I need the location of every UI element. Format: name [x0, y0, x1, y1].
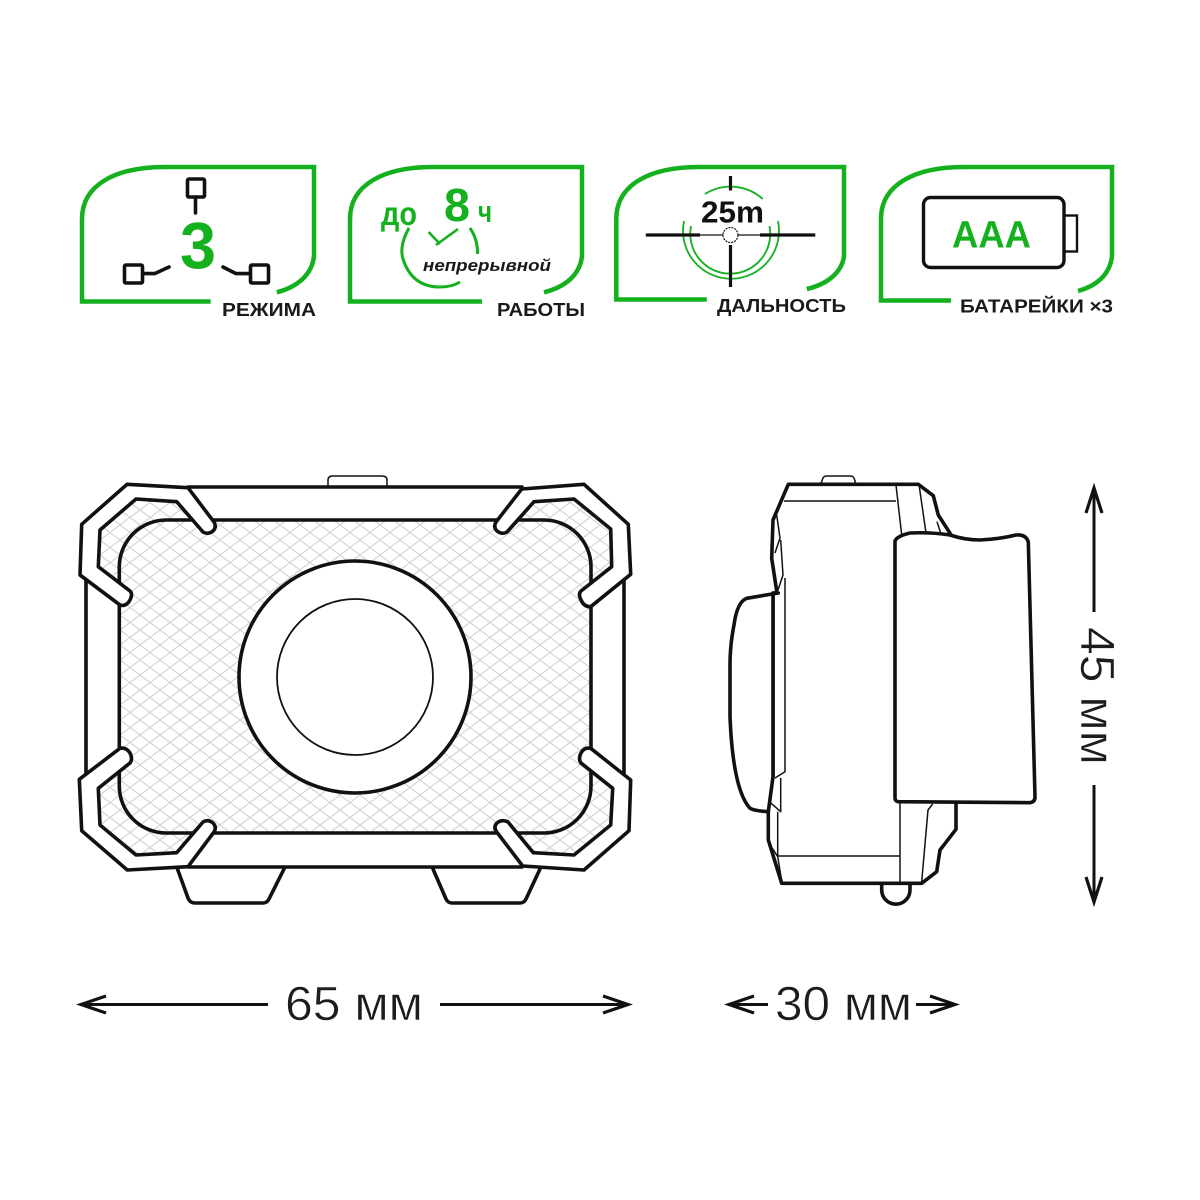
- icon: top mode lamp: [188, 179, 204, 213]
- head strap: [895, 533, 1035, 803]
- icon: battery: [924, 198, 1077, 268]
- text: hours: ч: [478, 194, 492, 229]
- label: modes: РЕЖИМА: [222, 299, 316, 320]
- value: 30 мм: [775, 978, 912, 1031]
- value: 45 мм: [1070, 627, 1123, 765]
- strap guard: top left: [80, 484, 215, 605]
- panel frame: [616, 167, 844, 300]
- panel: runtime: [350, 167, 585, 320]
- hatched housing face: [98, 499, 612, 855]
- panel frame: [82, 167, 314, 302]
- strap guard: top right: [495, 484, 631, 607]
- number 8: 8: [444, 179, 470, 231]
- text: AAA: AAA: [952, 214, 1031, 256]
- dimension: height 45 mm: [1070, 488, 1123, 902]
- left arrow: [81, 996, 268, 1013]
- bottom arrow: [1086, 785, 1102, 902]
- panel: modes: [82, 167, 316, 320]
- strap guard: bottom right: [495, 748, 631, 870]
- icon: right mode lamp: [223, 265, 268, 283]
- text: 25m: 25m: [701, 194, 764, 230]
- label: batteries x3: БАТАРЕЙКИ ×3: [960, 296, 1113, 316]
- panel: range: [616, 167, 846, 316]
- inner housing outline: [119, 520, 591, 833]
- left arrow: [729, 996, 768, 1013]
- panel frame: [881, 167, 1112, 300]
- panel: batteries: [881, 167, 1113, 316]
- label: range: ДАЛЬНОСТЬ: [717, 295, 846, 316]
- top button: [328, 476, 387, 487]
- text: continuous: непрерывной: [423, 256, 552, 275]
- strap guard: bottom left: [79, 748, 215, 870]
- side view of headlamp: [730, 476, 1035, 904]
- value: 65 мм: [285, 978, 423, 1031]
- outer housing lines: [86, 487, 624, 867]
- lens dome: [730, 593, 778, 812]
- body detail lines: [768, 485, 941, 883]
- lens bezel: [239, 561, 471, 793]
- dimension: depth 30 mm: [729, 978, 955, 1031]
- body outline: [768, 484, 956, 883]
- icon: reticle: [646, 176, 815, 287]
- right foot: [433, 869, 540, 903]
- top button: [821, 476, 856, 484]
- number 3: 3: [180, 208, 216, 282]
- icon: clock: [402, 228, 478, 287]
- dimension: width 65 mm: [81, 978, 628, 1031]
- panel frame: [350, 167, 582, 302]
- right arrow: [916, 996, 955, 1013]
- left foot: [178, 869, 284, 903]
- top arrow: [1086, 488, 1102, 612]
- label: runtime: РАБОТЫ: [497, 299, 585, 320]
- lens: [277, 599, 433, 755]
- icon: left mode lamp: [124, 265, 169, 283]
- front view of headlamp: [79, 476, 631, 903]
- text: up to: до: [381, 195, 417, 232]
- right arrow: [440, 996, 628, 1013]
- bottom loop: [882, 885, 910, 904]
